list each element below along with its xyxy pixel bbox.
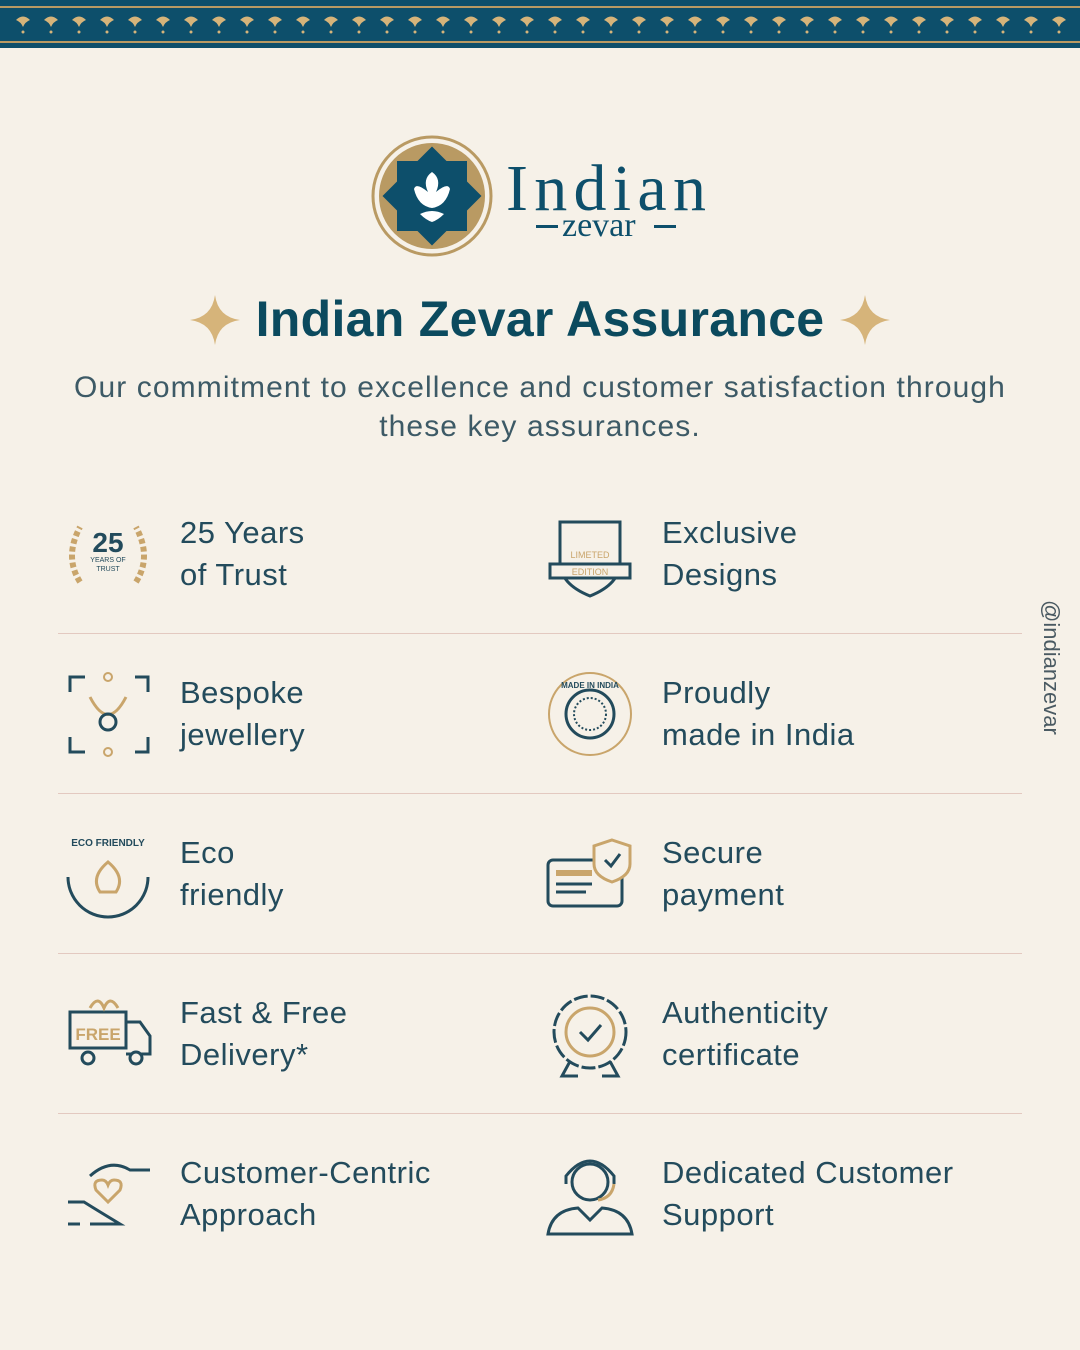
item: eco: friendly (180, 877, 284, 912)
item: customer centric (68, 1155, 431, 1232)
item: exclusive designs: Designs (662, 557, 778, 592)
item: eco (66, 835, 284, 918)
logo (372, 136, 706, 256)
item: exclusive designs: Exclusive (662, 515, 797, 550)
item: 25 years: YEARS OF (90, 557, 126, 564)
logo: zevar (562, 207, 636, 244)
item: support (546, 1155, 954, 1236)
item: eco: Eco (180, 835, 235, 870)
item: secure payment: payment (662, 877, 784, 912)
item: support: Support (662, 1197, 774, 1232)
item: made in india (548, 672, 855, 756)
item: exclusive designs: LIMETED (570, 550, 610, 560)
item: eco: ECO FRIENDLY (71, 838, 145, 849)
subtitle (74, 371, 1006, 443)
item: made in india: Proudly (662, 675, 771, 710)
top banner (0, 0, 1080, 48)
item: secure payment (546, 835, 784, 912)
item: customer centric: Customer-Centric (180, 1155, 431, 1190)
item: delivery: Fast & Free (180, 995, 347, 1030)
item: exclusive designs (548, 515, 797, 598)
item: support: Dedicated Customer (662, 1155, 954, 1190)
item: authenticity: Authenticity (662, 995, 828, 1030)
item: bespoke: jewellery (180, 717, 305, 752)
item: made in india: MADE IN INDIA (561, 681, 619, 690)
logo: Indian (506, 152, 706, 225)
item: authenticity (552, 994, 828, 1078)
item: delivery (68, 995, 347, 1072)
item: delivery: FREE (75, 1025, 121, 1044)
item: authenticity: certificate (662, 1037, 800, 1072)
title with stars: Indian Zevar Assurance (256, 291, 824, 347)
repeated ornaments (16, 16, 30, 34)
item: made in india: made in India (662, 717, 855, 752)
subtitle: Our commitment to excellence and customer satisfaction through (74, 371, 1006, 404)
item: bespoke (68, 672, 305, 757)
item: 25 years: 25 Years (180, 515, 305, 550)
item: 25 years: TRUST (96, 566, 120, 573)
item: exclusive designs: EDITION (572, 567, 608, 577)
item: customer centric: Approach (180, 1197, 317, 1232)
item: 25 years (69, 515, 305, 592)
item: 25 years: of Trust (180, 557, 287, 592)
handle: @indianzevar (1039, 600, 1064, 735)
subtitle: these key assurances. (379, 410, 701, 443)
item: bespoke: Bespoke (180, 675, 304, 710)
item: delivery: Delivery* (180, 1037, 309, 1072)
item: secure payment: Secure (662, 835, 763, 870)
item: 25 years: 25 (92, 527, 124, 558)
